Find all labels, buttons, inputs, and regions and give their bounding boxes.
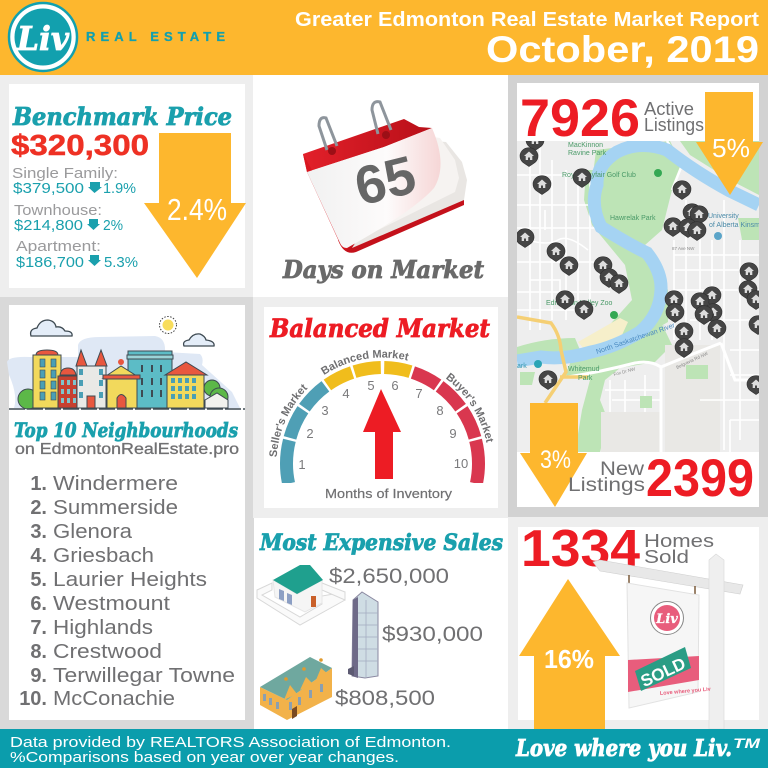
neighbourhood list: Glenora [53, 521, 133, 543]
panel: benchmark price [9, 84, 246, 288]
arrow value 5%: 5% [712, 133, 750, 163]
map: MacKinnon [568, 142, 603, 149]
neighbourhood list: Griesbach [53, 545, 154, 567]
neighbourhood list: 4. [30, 545, 47, 567]
gauge numbers: 2 [306, 426, 314, 441]
icon: tower [348, 592, 378, 678]
price 3: $808,500 [335, 687, 435, 710]
up arrow 16% [519, 579, 620, 729]
logo: Liv circle [9, 3, 77, 71]
homes sold label [644, 531, 714, 567]
neighbourhood list: 6. [30, 593, 47, 615]
gauge arc [287, 368, 478, 484]
active listings count: 7926 [520, 89, 640, 148]
neighbourhood list: 1. [30, 473, 47, 495]
gauge zone labels [269, 350, 494, 457]
panel: top 10 neighbourhoods [7, 305, 245, 720]
homes sold label: Sold [644, 547, 689, 567]
neighbourhood list: 8. [30, 641, 47, 663]
gauge numbers: 9 [449, 426, 457, 441]
down arrow 5% [696, 92, 763, 195]
map: University [708, 213, 739, 220]
gauge zone labels: Buyer's Market [446, 372, 494, 443]
icon: calendar: 65 [349, 145, 422, 217]
neighbourhood list: 7. [30, 617, 47, 639]
footer [0, 729, 768, 768]
report date: October, 2019 [486, 28, 759, 70]
down arrow 3% [520, 403, 587, 507]
new listings label [568, 459, 645, 496]
panel: days on market [282, 102, 484, 284]
new listings count: 2399 [646, 449, 754, 508]
gauge numbers [298, 378, 468, 472]
active listings label: Listings [644, 115, 704, 135]
gauge numbers: 1 [298, 457, 306, 472]
neighbourhood list: 2. [30, 497, 47, 519]
apartment: 5.3% [104, 255, 138, 271]
map: Belgravia Rd NW [675, 350, 709, 370]
neighbourhood list: Crestwood [53, 641, 162, 663]
new listings label: Listings [568, 475, 645, 496]
gauge numbers: 5 [367, 378, 375, 393]
red arrow indicator [363, 389, 401, 479]
active listings label [644, 99, 704, 135]
neighbourhood list: Terwillegar Towne [53, 665, 235, 687]
gauge numbers: 7 [415, 386, 423, 401]
icon: sold sign: Love where you Liv [660, 686, 712, 697]
apartment: Apartment: [16, 238, 101, 255]
days on market label: Days on Market [282, 255, 484, 284]
icon: house [257, 565, 345, 625]
map: Royal Mayfair Golf Club [562, 172, 636, 179]
heading: Balanced Market [269, 314, 490, 343]
map: Park [578, 375, 593, 382]
data source note [10, 735, 451, 766]
townhouse: Townhouse: [14, 202, 102, 219]
townhouse: $214,800 [14, 218, 83, 234]
map: 87 Ave NW [672, 246, 695, 251]
icon: sold sign: SOLD [638, 654, 689, 691]
arrow value 3%: 3% [540, 446, 571, 474]
logo wordmark: REAL ESTATE [86, 29, 225, 44]
icon: townhouse row [260, 657, 332, 720]
benchmark value: $320,300 [11, 130, 149, 162]
homes sold label: Homes [644, 531, 714, 551]
map: North Saskatchewan River [595, 322, 677, 356]
down arrow 2.4% [144, 133, 246, 278]
single family: 1.9% [103, 181, 136, 197]
price 2: $930,000 [382, 623, 483, 646]
gauge zone labels: Balanced Market [320, 350, 409, 375]
icon: calendar [303, 102, 467, 253]
icon: sold sign [593, 554, 743, 729]
logo: Liv circle: Liv [16, 19, 70, 58]
panel: homes sold [518, 520, 759, 729]
heading: Benchmark Price [12, 102, 232, 131]
neighbourhood list: 5. [30, 569, 47, 591]
report title: Greater Edmonton Real Estate Market Report [295, 8, 759, 31]
apartment [16, 238, 138, 271]
neighbourhood list [19, 473, 235, 710]
single family [12, 165, 136, 197]
gauge numbers: 6 [391, 378, 399, 393]
map: Ravine Park [568, 150, 607, 157]
neighbourhood list: Highlands [53, 617, 153, 639]
map: ark [517, 363, 527, 370]
map: of Alberta Kinsmen [709, 222, 768, 229]
months of inventory label: Months of Inventory [325, 487, 453, 501]
tagline: TM [733, 735, 760, 751]
heading: Most Expensive Sales [259, 530, 503, 556]
map: Fox Dr NW [613, 366, 636, 377]
neighbourhood list: 9. [30, 665, 47, 687]
map: Whitemud [568, 366, 600, 373]
townhouse [14, 202, 123, 234]
neighbourhood list: Laurier Heights [53, 569, 207, 591]
new listings label: New [600, 459, 644, 480]
gauge numbers: 4 [342, 386, 350, 401]
active listings label: Active [644, 99, 694, 119]
neighbourhood list: Westmount [53, 593, 171, 615]
apartment: $186,700 [16, 255, 84, 271]
map: Hawrelak Park [610, 215, 656, 222]
price 1: $2,650,000 [329, 565, 449, 588]
panel: most expensive sales [254, 518, 508, 729]
new listings strip [517, 452, 759, 507]
header banner [0, 0, 768, 75]
neighbourhood list: Windermere [53, 473, 178, 495]
single family: Single Family: [12, 165, 118, 182]
panel: listings map [516, 83, 768, 508]
arrow value 16%: 16% [544, 644, 594, 674]
homes sold count: 1334 [521, 520, 640, 578]
gauge numbers: 10 [454, 456, 468, 471]
heading: Top 10 Neighbourhoods [14, 418, 238, 442]
panel: balanced market gauge [264, 307, 498, 508]
map [516, 132, 768, 452]
illustration: city skyline [7, 316, 245, 409]
single family: $379,500 [13, 181, 84, 197]
gauge zone labels: Seller's Market [269, 384, 308, 457]
subheading: on EdmontonRealEstate.pro [15, 441, 239, 458]
arrow value: 2.4% [167, 192, 227, 227]
tagline: Love where you Liv. [515, 735, 732, 762]
icon: sold sign: Liv [655, 612, 678, 627]
neighbourhood list: McConachie [53, 688, 175, 710]
neighbourhood list: 3. [30, 521, 47, 543]
data source note: %Comparisons based on year over year changes. [10, 750, 399, 766]
gauge numbers: 3 [321, 403, 329, 418]
data source note: Data provided by REALTORS Association of Edmonton. [10, 735, 451, 751]
townhouse: 2% [103, 218, 123, 234]
map: Edmonton Valley Zoo [546, 300, 613, 307]
gauge numbers: 8 [436, 403, 444, 418]
neighbourhood list: Summerside [53, 497, 178, 519]
neighbourhood list: 10. [19, 688, 47, 710]
